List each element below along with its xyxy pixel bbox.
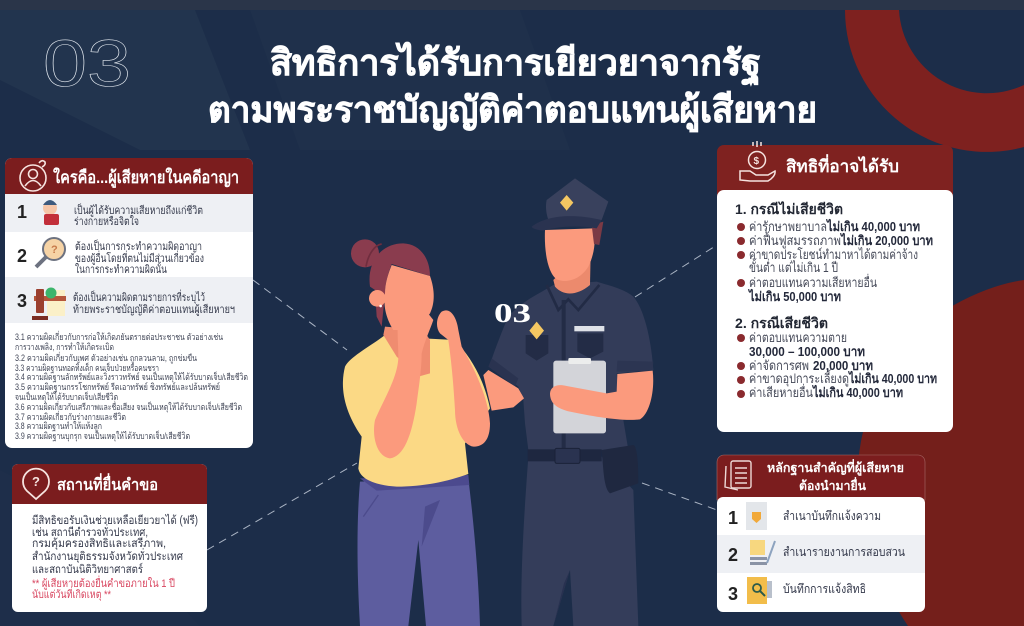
panel: who is a victim: ท้ายพระราชบัญญัติค่าตอบแทนผู้เสียหายฯ	[73, 303, 235, 316]
icon: hand with coin	[740, 141, 775, 181]
panel: evidence: 2	[728, 545, 738, 565]
list of offences: 3.6 ความผิดเกี่ยวกับเสรีภาพและชื่อเสียง จนเป็นเหตุให้ได้รับบาดเจ็บ/เสียชีวิต	[15, 400, 242, 413]
filing locations text: และสถาบันนิติวิทยาศาสตร์	[32, 562, 143, 576]
icon: injured person	[43, 200, 59, 225]
case 2: fatal: ค่าจัดการศพ	[749, 358, 809, 373]
illustration: woman and police officer	[343, 178, 653, 626]
list of offences: 3.1 ความผิดเกี่ยวกับการก่อให้เกิดภยันตรายต่อประชาชน ตัวอย่างเช่น	[15, 330, 223, 342]
connector lines	[207, 245, 717, 550]
panel: who is a victim: เป็นผู้ได้รับความเสียหายถึงแก่ชีวิต	[74, 203, 203, 217]
list of offences: 3.8 ความผิดฐานทำให้แท้งลูก	[15, 421, 102, 432]
panel: who is a victim: ใครคือ...ผู้เสียหายในคดีอาญา	[53, 167, 239, 189]
filing locations text: กรมคุ้มครองสิทธิและเสรีภาพ,	[32, 537, 166, 550]
panel: who is a victim: ต้องเป็นความผิดตามรายการที่ระบุไว้	[73, 289, 205, 304]
case 1: not fatal: ไม่เกิน 40,000 บาท	[825, 218, 920, 234]
case 1: not fatal: ไม่เกิน 50,000 บาท	[747, 288, 841, 304]
case 1: not fatal: ค่าขาดประโยชน์ทำมาหาได้ตามค่าจ้าง	[749, 247, 918, 262]
icon: location question pin	[23, 469, 49, 499]
list of offences	[15, 330, 248, 442]
list of offences: จนเป็นเหตุให้ได้รับบาดเจ็บ/เสียชีวิต	[15, 390, 118, 403]
icon: person question	[20, 161, 46, 191]
icon: hand with coin: $	[754, 156, 760, 167]
case 1: not fatal: ค่ารักษาพยาบาล	[749, 219, 827, 234]
panel: rights	[717, 141, 953, 432]
panel header	[12, 464, 207, 504]
panel: who is a victim: ร่างกายหรือจิตใจ	[74, 215, 139, 228]
icon: location question pin: ?	[32, 474, 40, 489]
panel: evidence: บันทึกการแจ้งสิทธิ	[783, 582, 866, 596]
case 2: fatal: ค่าตอบแทนความตาย	[749, 330, 847, 345]
filing locations text: ** ผู้เสียหายต้องยื่นคำขอภายใน 1 ปี	[32, 575, 175, 590]
panel: who is a victim: 1	[17, 202, 27, 222]
filing locations text: นับแต่วันที่เกิดเหตุ **	[32, 586, 112, 601]
panel: who is a victim: ต้องเป็นการกระทำความผิดอาญา	[75, 239, 202, 253]
panel: evidence: ต้องนำมายื่น	[799, 477, 866, 493]
case 1: not fatal: ขั้นต่ำ แต่ไม่เกิน 1 ปี	[749, 258, 838, 275]
filing locations text: สำนักงานยุติธรรมจังหวัดทั่วประเทศ	[32, 548, 184, 563]
panel: evidence: หลักฐานสำคัญที่ผู้เสียหาย	[767, 459, 904, 476]
panel: evidence: สำเนารายงานการสอบสวน	[783, 545, 905, 559]
title: ตามพระราชบัญญัติค่าตอบแทนผู้เสียหาย	[208, 89, 817, 133]
panel: who is a victim: ของผู้อื่นโดยที่ตนไม่มีส่วนเกี่ยวข้อง	[75, 250, 204, 265]
icon: report document	[746, 502, 767, 530]
panel: where to file: สถานที่ยื่นคำขอ	[57, 473, 158, 494]
case 2: fatal: ค่าเสียหายอื่น	[749, 384, 813, 400]
case 2: fatal: ไม่เกิน 40,000 บาท	[847, 370, 937, 386]
case 2: fatal: ไม่เกิน 40,000 บาท	[811, 384, 903, 400]
case 2: fatal: 20,000 บาท	[813, 358, 873, 373]
panel: evidence: 3	[728, 584, 738, 604]
list of offences: 3.3 ความผิดฐานทอดทิ้งเด็ก คนเจ็บป่วยหรือคนชรา	[15, 361, 159, 374]
woman	[343, 239, 490, 626]
decorative red shape	[858, 280, 1024, 626]
case 2: fatal: 2. กรณีเสียชีวิต	[735, 315, 828, 331]
panel header	[5, 158, 253, 194]
decorative red ring	[845, 10, 1024, 152]
title	[208, 41, 817, 133]
icon: gavel with check	[32, 288, 66, 320]
list of offences: 3.9 ความผิดฐานบุกรุก จนเป็นเหตุให้ได้รับบาดเจ็บ/เสียชีวิต	[15, 429, 190, 442]
case 1: not fatal: ค่าตอบแทนความเสียหายอื่น	[749, 274, 877, 290]
icon: folder with magnifier	[747, 577, 772, 604]
list of offences: 3.4 ความผิดฐานลักทรัพย์และวิ่งราวทรัพย์ จนเป็นเหตุให้ได้รับบาดเจ็บ/เสียชีวิต	[15, 370, 248, 383]
case 1: not fatal: ค่าฟื้นฟูสมรรถภาพ	[749, 231, 841, 249]
panel: evidence	[717, 455, 925, 612]
big outlined number 03: 03	[43, 26, 131, 100]
panel: evidence: สำเนาบันทึกแจ้งความ	[783, 509, 881, 523]
case 1: not fatal	[735, 200, 933, 304]
case 2: fatal: ค่าขาดอุปการะเลี้ยงดู	[749, 369, 849, 387]
list of offences: การวางเพลิง, การทำให้เกิดระเบิด	[15, 342, 114, 352]
filing locations text: เช่น สถานีตำรวจทั่วประเทศ,	[32, 524, 148, 539]
panel: who is a victim: 3	[17, 291, 27, 311]
title: สิทธิการได้รับการเยียวยาจากรัฐ	[270, 41, 761, 86]
icon: paper and pen	[750, 540, 775, 565]
panel: who is a victim: 2	[17, 246, 27, 266]
list of offences: 3.2 ความผิดเกี่ยวกับเพศ ตัวอย่างเช่น ถูกลวนลาม, ถูกข่มขืน	[15, 351, 197, 364]
case 1: not fatal: ไม่เกิน 20,000 บาท	[839, 232, 933, 248]
case 2: fatal: 30,000 – 100,000 บาท	[749, 344, 865, 359]
case 1: not fatal: 1. กรณีไม่เสียชีวิต	[735, 200, 843, 217]
panel: who is a victim: ในการกระทำความผิดนั้น	[75, 261, 167, 276]
panel: evidence: 1	[728, 508, 738, 528]
list of offences: 3.5 ความผิดฐานกรรโชกทรัพย์ รีดเอาทรัพย์ ชิงทรัพย์และปล้นทรัพย์	[15, 381, 220, 393]
list of offences: 3.7 ความผิดเกี่ยวกับร่างกายและชีวิต	[15, 410, 126, 422]
filing locations text: มีสิทธิขอรับเงินช่วยเหลือเยียวยาได้ (ฟรี)	[32, 514, 198, 527]
panel: rights: สิทธิที่อาจได้รับ	[786, 154, 899, 176]
panel: where to file	[12, 464, 207, 612]
panel: who is a victim	[5, 158, 253, 448]
small serif number 03: 03	[494, 298, 531, 328]
icon: documents	[725, 461, 751, 490]
filing locations text	[32, 514, 198, 601]
icon: magnifier	[36, 238, 65, 267]
police officer	[483, 178, 653, 626]
icon: magnifier: ?	[51, 244, 58, 256]
case 2: fatal	[735, 315, 937, 400]
